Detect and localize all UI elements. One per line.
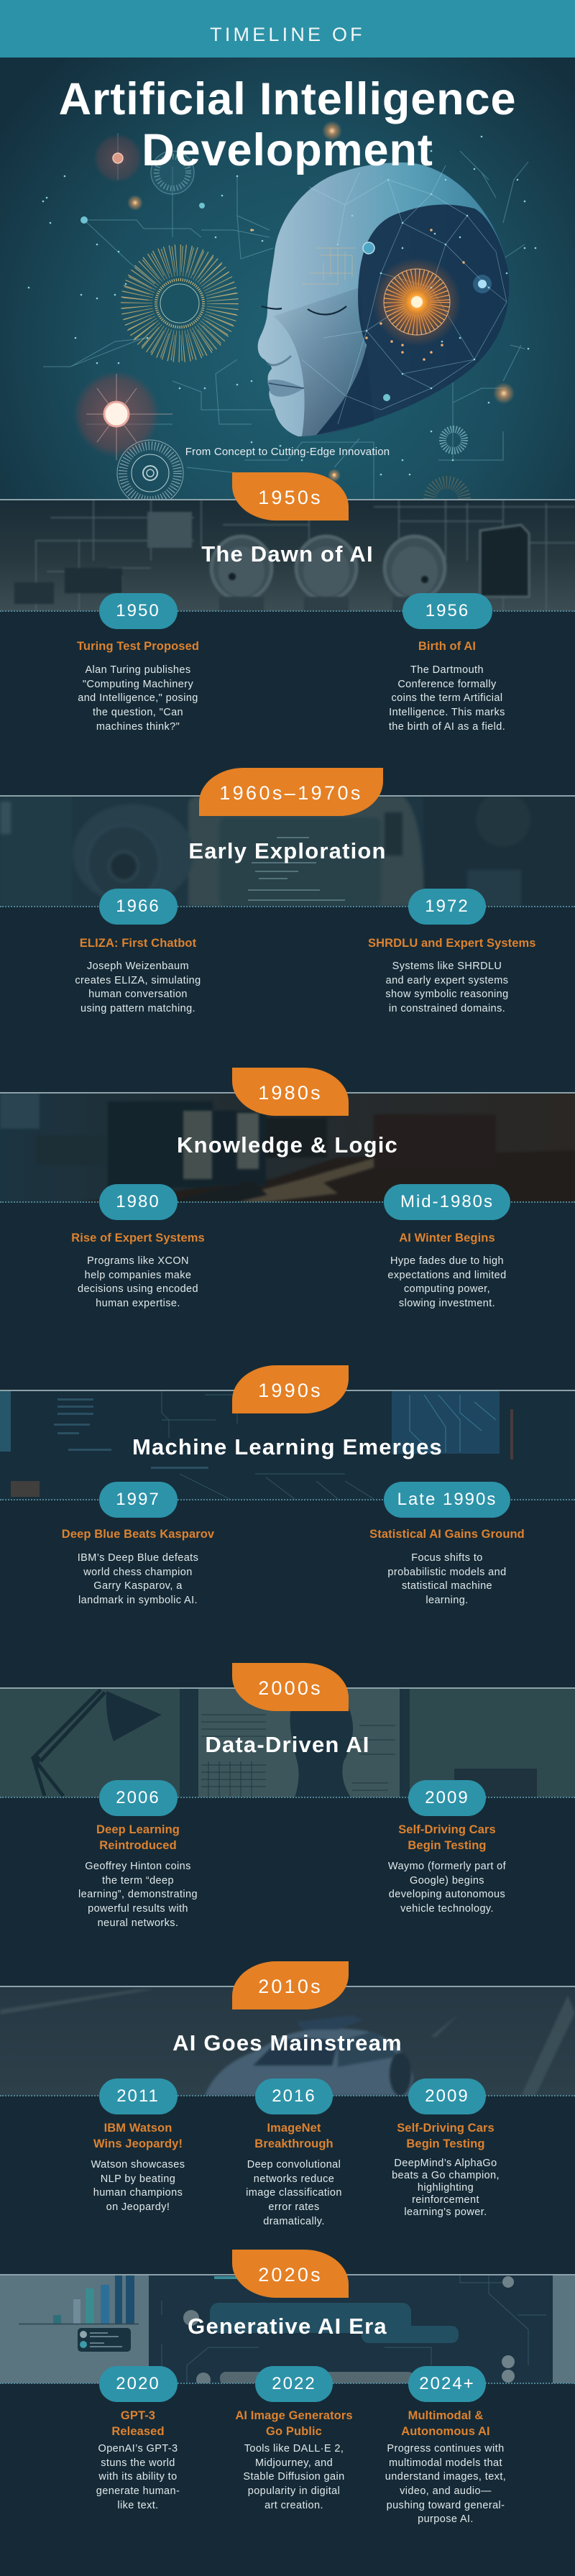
year pill: 1966 [116, 897, 160, 916]
header label: TIMELINE OF [210, 24, 365, 45]
panel: 2010s [0, 1961, 575, 2227]
year pill: 1972 [425, 897, 469, 916]
event: 2011 [91, 2078, 185, 2213]
event title [59, 2408, 217, 2439]
event: 2024+ [367, 2366, 525, 2510]
year pill: 1956 [426, 601, 469, 620]
section heading: The Dawn of AI [201, 541, 374, 567]
event title: Wins Jeopardy! [93, 2137, 183, 2150]
event text: show symbolic reasoning [385, 989, 509, 1000]
event title: AI Winter Begins [399, 1232, 495, 1245]
event text: generate human- [96, 2485, 180, 2497]
year pill: 2011 [116, 2086, 160, 2106]
era badge: 1980s [258, 1082, 323, 1104]
event text: stuns the world [101, 2457, 175, 2469]
event text [215, 2158, 373, 2229]
year pill: 2024+ [419, 2374, 475, 2393]
event text: beats a Go champion, [392, 2170, 500, 2181]
event text: Waymo (formerly part of [388, 1861, 506, 1872]
event text [388, 1861, 506, 1915]
event text: neural networks. [98, 1917, 178, 1929]
event text: the question, "Can [93, 707, 183, 718]
event text [75, 961, 201, 1014]
main title [59, 74, 516, 175]
icon: radial gear [117, 440, 183, 506]
event: 1966 [75, 889, 201, 1014]
year pill: 2020 [116, 2374, 160, 2393]
event text: "Computing Machinery [83, 679, 193, 690]
divider line top [0, 1687, 575, 1689]
event title: Autonomous AI [401, 2425, 490, 2438]
event title: Statistical AI Gains Ground [369, 1528, 525, 1541]
event title: SHRDLU and Expert Systems [368, 937, 536, 950]
era badge [199, 768, 383, 816]
event text [387, 1255, 507, 1309]
event text: reinforcement [412, 2194, 479, 2206]
event text: like text. [117, 2500, 159, 2511]
event text: NLP by beating [101, 2173, 175, 2185]
era badge: 1960s–1970s [219, 782, 363, 804]
background image: 1980s computer room [0, 1094, 575, 1202]
era badge [232, 2250, 349, 2298]
event title: ELIZA: First Chatbot [80, 937, 196, 950]
panel: 1980s [0, 1068, 575, 1309]
event text: statistical machine [402, 1580, 492, 1592]
era badge [232, 472, 349, 521]
event text: networks reduce [254, 2173, 334, 2185]
event text: art creation. [264, 2500, 323, 2511]
event: 1997 [62, 1482, 214, 1606]
event title: Deep Learning [96, 1823, 180, 1836]
event text: Programs like XCON [87, 1255, 189, 1267]
event text: learning. [426, 1595, 469, 1606]
event text: landmark in symbolic AI. [78, 1595, 198, 1606]
event text: Watson showcases [91, 2159, 185, 2171]
subtitle: From Concept to Cutting-Edge Innovation [185, 446, 390, 458]
event text: understand images, text, [385, 2471, 506, 2483]
event text: DeepMind’s AlphaGo [394, 2157, 497, 2168]
event text: the term “deep [102, 1875, 174, 1887]
event title [398, 1823, 496, 1852]
year pill [99, 1482, 177, 1518]
divider line top [0, 1092, 575, 1094]
event text: OpenAI’s GPT-3 [98, 2443, 178, 2454]
era badge [232, 1068, 349, 1116]
event text: Midjourney, and [255, 2457, 333, 2469]
event: 1972 [368, 889, 536, 1014]
event text [389, 664, 505, 733]
section heading: Machine Learning Emerges [132, 1434, 443, 1459]
event text [78, 1552, 198, 1606]
event title: Go Public [266, 2425, 322, 2438]
event text: expectations and limited [387, 1270, 507, 1281]
dotted timeline [0, 2095, 575, 2096]
event text: Progress continues with [387, 2443, 505, 2454]
divider line top [0, 2274, 575, 2275]
section heading: Knowledge & Logic [177, 1132, 398, 1158]
event text: and early expert systems [386, 975, 508, 986]
panel: 2020s [0, 2250, 575, 2576]
year pill [408, 889, 486, 925]
dotted timeline [0, 1499, 575, 1500]
event text: IBM’s Deep Blue defeats [78, 1552, 198, 1564]
event text: Focus shifts to [411, 1552, 483, 1564]
event text: with its ability to [98, 2471, 178, 2483]
era badge: 1950s [258, 487, 323, 508]
event title: Birth of AI [418, 640, 476, 653]
event text: in constrained domains. [389, 1003, 505, 1014]
dotted timeline [0, 610, 575, 612]
era badge [232, 1961, 349, 2009]
event text [367, 2442, 525, 2527]
event title: Breakthrough [254, 2137, 334, 2150]
event text: dramatically. [263, 2216, 325, 2227]
event text: developing autonomous [389, 1889, 505, 1900]
year pill [99, 1184, 177, 1220]
event text: human conversation [88, 989, 188, 1000]
year pill: 1980 [116, 1192, 160, 1211]
era badge: 1990s [258, 1380, 323, 1401]
divider line top [0, 795, 575, 797]
event title: IBM Watson [104, 2122, 172, 2135]
event text: and Intelligence," posing [78, 692, 198, 704]
era badge [232, 1663, 349, 1711]
year pill [99, 2078, 177, 2114]
year pill [402, 593, 492, 629]
section heading: AI Goes Mainstream [172, 2030, 402, 2055]
event text: human expertise. [96, 1298, 180, 1309]
event title: Rise of Expert Systems [71, 1232, 205, 1245]
event text: purpose AI. [418, 2513, 474, 2525]
event text: Intelligence. This marks [389, 707, 505, 718]
panel: 1960s-1970s [0, 768, 575, 1014]
year pill: Mid-1980s [400, 1192, 494, 1211]
year pill: Late 1990s [397, 1490, 497, 1509]
year pill [384, 1482, 510, 1518]
year pill [99, 593, 177, 629]
event text: vehicle technology. [400, 1903, 494, 1915]
event text: error rates [268, 2201, 320, 2213]
event text: Tools like DALL·E 2, [244, 2443, 344, 2454]
panel: 2000s [0, 1663, 575, 1929]
event: 2006 [78, 1780, 198, 1929]
event text [78, 1255, 198, 1309]
year pill [255, 2366, 333, 2402]
dotted timeline [0, 906, 575, 907]
event text: learning”, demonstrating [78, 1889, 198, 1900]
event text: image classification [246, 2187, 342, 2199]
year pill [99, 1780, 177, 1816]
icon: gold sunburst [135, 259, 224, 348]
event: 1950 [77, 593, 199, 733]
year pill: 2009 [425, 1788, 469, 1807]
event text: Stable Diffusion gain [243, 2471, 345, 2483]
event title: Released [111, 2425, 165, 2438]
background image: self-driving car on road [0, 1987, 575, 2096]
event text: Garry Kasparov, a [93, 1580, 183, 1592]
event: Late 1990s [369, 1482, 525, 1606]
event title: Deep Blue Beats Kasparov [62, 1528, 214, 1541]
event text: world chess champion [83, 1567, 193, 1578]
event text: pushing toward general- [387, 2500, 505, 2511]
event text: human champions [93, 2187, 183, 2199]
event text: Deep convolutional [247, 2159, 341, 2171]
year pill [408, 2078, 486, 2114]
event title [96, 1823, 180, 1852]
background image: early computer terminal [0, 797, 575, 907]
event text [78, 664, 198, 733]
dotted timeline [0, 1201, 575, 1203]
year pill: 1950 [116, 601, 160, 620]
event text [59, 2442, 217, 2513]
event text [385, 961, 509, 1014]
year pill [99, 889, 177, 925]
event title: ImageNet [267, 2122, 321, 2135]
event text: slowing investment. [399, 1298, 495, 1309]
event title: Self-Driving Cars [397, 2122, 494, 2135]
event text [367, 2157, 525, 2219]
event text [91, 2159, 185, 2213]
event: 1956 [389, 593, 505, 733]
year pill: 1997 [116, 1490, 160, 1509]
event: 2016 [246, 2078, 342, 2227]
event text: Geoffrey Hinton coins [85, 1861, 191, 1872]
event title: Self-Driving Cars [398, 1823, 496, 1836]
event title [367, 2120, 525, 2152]
year pill [408, 1780, 486, 1816]
main title: Development [142, 125, 433, 175]
event: 2020 [59, 2366, 217, 2510]
event title [215, 2120, 373, 2152]
event text: highlighting [418, 2181, 474, 2193]
event title: Begin Testing [408, 1839, 487, 1852]
era badge: 2000s [258, 1677, 323, 1699]
icon: orange energy burst [372, 257, 461, 347]
event text: creates ELIZA, simulating [75, 975, 201, 986]
event title: GPT-3 [121, 2409, 155, 2422]
background image: vintage machines and dials [0, 500, 575, 611]
event text: Hype fades due to high [390, 1255, 504, 1267]
event text [78, 1861, 198, 1929]
event: 2009 [367, 2078, 525, 2222]
event text: The Dartmouth [410, 664, 484, 676]
year pill [408, 2366, 486, 2402]
panel: 1990s [0, 1365, 575, 1606]
event text: Conference formally [397, 679, 497, 690]
background image: circuit control panel [0, 1391, 513, 1500]
year pill [255, 2078, 333, 2114]
year pill [99, 2366, 177, 2402]
background image: desk lamp and data screen [0, 1689, 575, 1797]
divider line top [0, 499, 575, 500]
event title [367, 2408, 525, 2439]
dotted timeline [0, 1797, 575, 1798]
event title [215, 2408, 373, 2439]
year pill: 2022 [272, 2374, 316, 2393]
event text: Alan Turing publishes [85, 664, 191, 676]
event text: coins the term Artificial [391, 692, 503, 704]
main title: Artificial Intelligence [59, 74, 516, 124]
event text [387, 1552, 507, 1606]
event text: on Jeopardy! [106, 2201, 170, 2213]
divider line top [0, 1986, 575, 1987]
icon: human head profile [258, 162, 509, 436]
event text: learning's power. [404, 2206, 487, 2217]
divider line top [0, 1390, 575, 1391]
event text: Systems like SHRDLU [392, 961, 502, 972]
section heading: Data-Driven AI [205, 1732, 370, 1757]
header bar [0, 0, 575, 58]
event title: Turing Test Proposed [77, 640, 199, 653]
panel: 1950s [0, 472, 575, 733]
event text: using pattern matching. [80, 1003, 196, 1014]
dotted timeline [0, 2383, 575, 2384]
event text: decisions using encoded [78, 1283, 198, 1295]
event title [93, 2122, 183, 2150]
event text: the birth of AI as a field. [389, 721, 505, 733]
event title: AI Image Generators [235, 2409, 353, 2422]
event: 2009 [388, 1780, 506, 1915]
event text: probabilistic models and [387, 1567, 507, 1578]
hero illustration: AI head and neural network [0, 58, 575, 499]
event text: video, and audio— [400, 2485, 492, 2497]
event text: computing power, [404, 1283, 490, 1295]
event text: powerful results with [88, 1903, 188, 1915]
event title: Begin Testing [406, 2137, 485, 2150]
year pill: 2006 [116, 1788, 160, 1807]
event text: popularity in digital [248, 2485, 340, 2497]
event: 2022 [215, 2366, 373, 2510]
background image: generative AI chat interface [0, 2275, 575, 2383]
era badge: 2020s [258, 2264, 323, 2286]
event: 1980 [71, 1184, 205, 1309]
icon: pink glowing orb [73, 371, 172, 460]
year pill: 2009 [425, 2086, 469, 2106]
event text: help companies make [85, 1270, 191, 1281]
event text: Google) begins [410, 1875, 484, 1887]
event text: multimodal models that [389, 2457, 502, 2469]
year pill: 2016 [272, 2086, 316, 2106]
event text: Joseph Weizenbaum [87, 961, 189, 972]
section heading: Early Exploration [188, 838, 387, 863]
event: Mid-1980s [384, 1184, 510, 1309]
era badge: 2010s [258, 1976, 323, 1997]
year pill [384, 1184, 510, 1220]
event text [215, 2442, 373, 2513]
section heading: Generative AI Era [188, 2314, 387, 2339]
event title: Reintroduced [99, 1839, 177, 1852]
event title: Multimodal & [408, 2409, 483, 2422]
event text: machines think?" [96, 721, 180, 733]
era badge [232, 1365, 349, 1413]
